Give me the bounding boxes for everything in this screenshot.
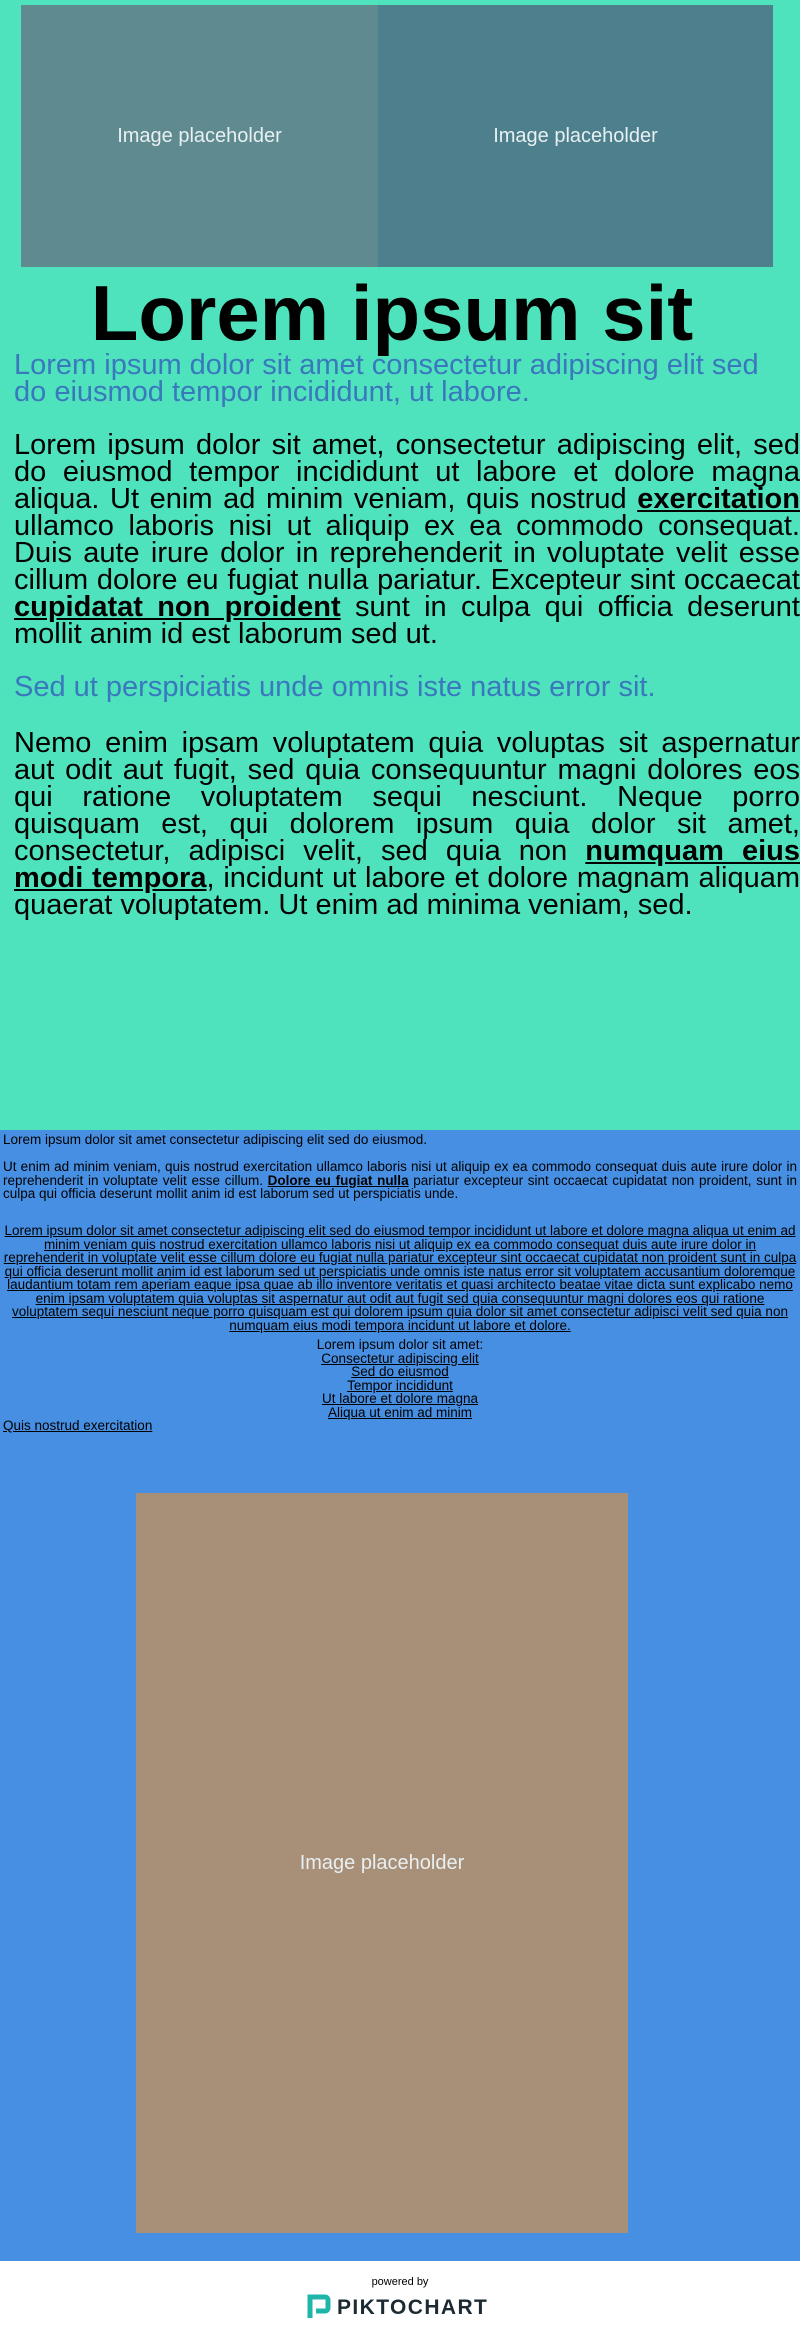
text block: centered short list: Aliqua ut enim ad minim — [328, 1404, 472, 1420]
text block: final link: Quis nostrud exercitation — [3, 1418, 152, 1433]
text: piktochart wordmark: PIKTOCHART — [337, 2296, 488, 2319]
image placeholder: large portrait: Image placeholder — [300, 1852, 464, 1874]
text block: centered link list: Lorem ipsum dolor sit amet consectetur adipiscing elit sed do eiusmod tempor incididunt ut labore et dolore magna aliqua ut enim ad minim veniam quis nostrud exercitation ullamco laboris nisi ut aliquip ex ea commodo consequat duis aute irure dolor in reprehenderit in voluptate velit esse cillum dolore eu fugiat nulla pariatur excepteur sint occaecat cupidatat non proident sunt in culpa qui officia deserunt mollit anim id est laborum sed ut perspiciatis unde omnis iste natus error sit voluptatem accusantium doloremque laudantium totam rem aperiam eaque ipsa quae ab illo inventore veritatis et quasi architecto beatae vitae dicta sunt explicabo nemo enim ipsam voluptatem quia voluptas sit aspernatur aut odit aut fugit sed quia consequuntur magni dolores eos qui ratione voluptatem sequi nesciunt neque porro quisquam est qui dolorem ipsum quia dolor sit amet consectetur adipisci velit sed quia non numquam eius modi tempora incidunt ut labore et dolore. — [4, 1223, 796, 1332]
text block: centered short list: Lorem ipsum dolor sit amet: — [317, 1337, 483, 1352]
image placeholder: large portrait — [136, 1493, 628, 2233]
text: powered by: powered by — [372, 2276, 428, 2288]
text block: centered short list: Sed do eiusmod — [351, 1364, 449, 1379]
text block: centered short list: Ut labore et dolore magna — [322, 1391, 478, 1406]
text block: intro line: Lorem ipsum dolor sit amet consectetur adipiscing elit sed do eiusmod. — [3, 1132, 427, 1147]
title: Lorem ipsum sit — [91, 269, 693, 357]
panel: lower section background — [0, 1130, 800, 2261]
image placeholder: left banner — [21, 5, 378, 267]
text block: summary paragraph: Ut enim ad minim veniam, quis nostrud exercitation ullamco laboris nisi ut aliquip ex ea commodo consequat duis aute irure dolor in reprehenderit in voluptate velit esse cillum. Dolore eu fugiat nulla pariatur excepteur sint occaecat cupidatat non proident, sunt in culpa qui officia deserunt mollit anim id est laborum sed ut perspiciatis unde. — [3, 1159, 797, 1201]
heading: second subheading: Sed ut perspiciatis unde omnis iste natus error sit. — [14, 671, 656, 703]
text block: centered short list: Tempor incididunt — [347, 1378, 453, 1392]
text block: centered short list: Consectetur adipiscing elit — [321, 1350, 479, 1366]
text block: second paragraph: Nemo enim ipsam voluptatem quia voluptas sit aspernatur aut odit aut fugit, sed quia consequuntur magni dolores eos qui ratione voluptatem sequi nesciunt. Neque porro quisquam est, qui dolorem ipsum quia dolor sit amet, consectetur, adipisci velit, sed quia non numquam eius modi tempora, incidunt ut labore et dolore magnam aliquam quaerat voluptatem. Ut enim ad minima veniam, sed. — [14, 727, 800, 921]
heading: first subheading: Lorem ipsum dolor sit amet consectetur adipiscing elit sed do eiusmod tempor incididunt, ut labore. — [14, 349, 759, 408]
text block: first paragraph: Lorem ipsum dolor sit amet, consectetur adipiscing elit, sed do eiusmod tempor incididunt ut labore et dolore magna aliqua. Ut enim ad minim veniam, quis nostrud exercitation ullamco laboris nisi ut aliquip ex ea commodo consequat. Duis aute irure dolor in reprehenderit in voluptate velit esse cillum dolore eu fugiat nulla pariatur. Excepteur sint occaecat cupidatat non proident sunt in culpa qui officia deserunt mollit anim id est laborum sed ut. — [14, 429, 800, 650]
text block: centered short list — [317, 1337, 483, 1420]
image placeholder: left banner: Image placeholder — [117, 124, 282, 146]
image placeholder: right banner: Image placeholder — [493, 124, 658, 146]
image placeholder: right banner — [378, 5, 773, 267]
panel: top section background — [0, 0, 800, 1130]
panel: footer — [0, 2261, 800, 2342]
icon: piktochart mark — [308, 2294, 330, 2318]
